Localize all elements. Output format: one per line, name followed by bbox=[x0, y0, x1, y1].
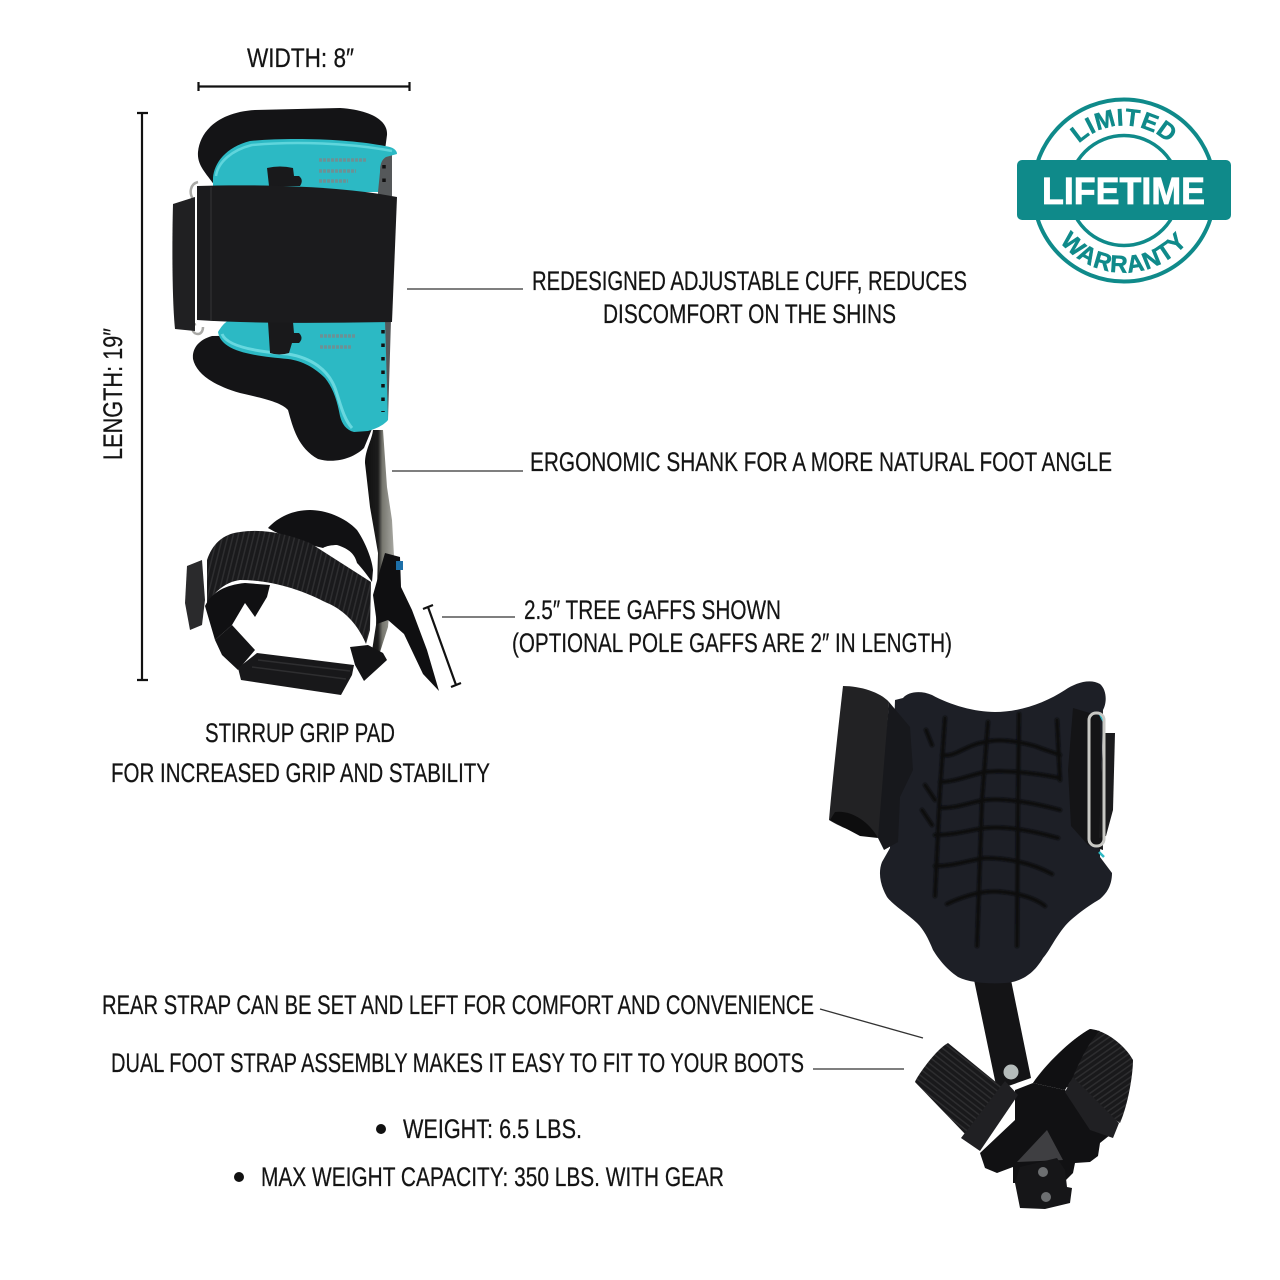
callout: stirrup grip pad: FOR INCREASED GRIP AND STABILITY bbox=[111, 758, 490, 788]
right strap inner band bbox=[1033, 1029, 1100, 1090]
strap under-frame bbox=[205, 583, 270, 640]
teal lower cuff shell bbox=[218, 320, 388, 432]
left strap pocket bbox=[829, 686, 889, 838]
rear foot strap bbox=[268, 510, 373, 582]
left ribbed foot strap bbox=[915, 1043, 1005, 1135]
side lacing holes bbox=[383, 165, 384, 412]
callout: adjustable cuff: REDESIGNED ADJUSTABLE CUFF, REDUCES bbox=[532, 266, 967, 296]
metal side rail of cuff bbox=[378, 155, 392, 420]
stirrup frame with centre hub bbox=[980, 1083, 1110, 1183]
stirrup clamp block bbox=[1015, 1158, 1072, 1209]
callout: tree gaffs with dimension bar: 2.5″ TREE GAFFS SHOWN bbox=[524, 595, 781, 625]
velcro cuff strap bbox=[197, 185, 397, 323]
right strap flap bbox=[1099, 733, 1115, 838]
stirrup grip pad bbox=[238, 653, 354, 695]
left strap buckle bbox=[961, 1081, 1018, 1151]
cuff buckles bbox=[267, 166, 302, 354]
callout: dual foot strap: DUAL FOOT STRAP ASSEMBLY MAKES IT EASY TO FIT TO YOUR BOOTS bbox=[111, 1048, 804, 1078]
length dimension: 19 inches: LENGTH: 19″ bbox=[98, 328, 128, 460]
callout: adjustable cuff: DISCOMFORT ON THE SHINS bbox=[603, 299, 896, 329]
teal edge of cuff shell bbox=[1099, 714, 1104, 857]
padded cuff back bbox=[880, 681, 1112, 983]
right strap buckle bbox=[1065, 1077, 1119, 1138]
gaff block and tree gaff bbox=[373, 553, 439, 691]
teal upper cuff shell bbox=[213, 139, 397, 192]
clamp bolts bbox=[1038, 1167, 1051, 1202]
width dimension: 8 inches: WIDTH: 8″ bbox=[247, 43, 354, 73]
warranty badge bbox=[1017, 98, 1231, 284]
left strap flap bbox=[172, 197, 195, 331]
callout: tree gaffs with dimension bar: (OPTIONAL POLE GAFFS ARE 2″ IN LENGTH) bbox=[512, 628, 952, 658]
side strap buckle bbox=[185, 560, 205, 630]
cuff pad moulded grooves bbox=[922, 714, 1060, 946]
product side view: climber with cuff, shank, gaff and stirrup bbox=[172, 108, 439, 695]
right velcro strap bbox=[1068, 708, 1103, 850]
left strap edge panel bbox=[878, 702, 913, 850]
specification: weight: WEIGHT: 6.5 LBS. bbox=[403, 1114, 582, 1144]
callout: stirrup grip pad: STIRRUP GRIP PAD bbox=[205, 718, 395, 748]
stirrup arms bbox=[215, 625, 387, 681]
length dimension: 19 inches bbox=[98, 112, 148, 681]
callout: stirrup grip pad bbox=[111, 718, 490, 788]
badge word: LIFETIME: LIFETIME bbox=[1042, 171, 1205, 213]
badge word: LIMITED: LIMITED bbox=[1070, 108, 1176, 143]
right ribbed foot strap bbox=[1033, 1029, 1133, 1123]
mounting bolt bbox=[1004, 1064, 1018, 1080]
callout: rear strap bbox=[102, 990, 923, 1038]
specification: max weight capacity: MAX WEIGHT CAPACITY: 350 LBS. WITH GEAR bbox=[261, 1162, 724, 1192]
cuff shell small printing bbox=[319, 160, 366, 347]
callout: tree gaffs with dimension bar bbox=[423, 595, 952, 687]
width dimension: 8 inches bbox=[198, 43, 410, 91]
badge banner bbox=[1017, 160, 1231, 220]
steel plate bbox=[1017, 1130, 1063, 1162]
badge word: WARRANTY: WARRANTY bbox=[1062, 230, 1184, 274]
lower foam pad bbox=[193, 335, 384, 461]
callout: rear strap: REAR STRAP CAN BE SET AND LEFT FOR COMFORT AND CONVENIENCE bbox=[102, 990, 814, 1020]
callout: adjustable cuff bbox=[407, 266, 967, 329]
front ribbed foot strap bbox=[207, 531, 371, 644]
callout: ergonomic shank: ERGONOMIC SHANK FOR A MORE NATURAL FOOT ANGLE bbox=[530, 447, 1112, 477]
product rear view: padded cuff and foot straps bbox=[829, 681, 1133, 1209]
blue adjustment bolt bbox=[396, 561, 403, 570]
ergonomic shank bbox=[365, 430, 394, 664]
metal strap loop bbox=[1089, 713, 1104, 846]
D-ring hardware bbox=[191, 182, 203, 334]
